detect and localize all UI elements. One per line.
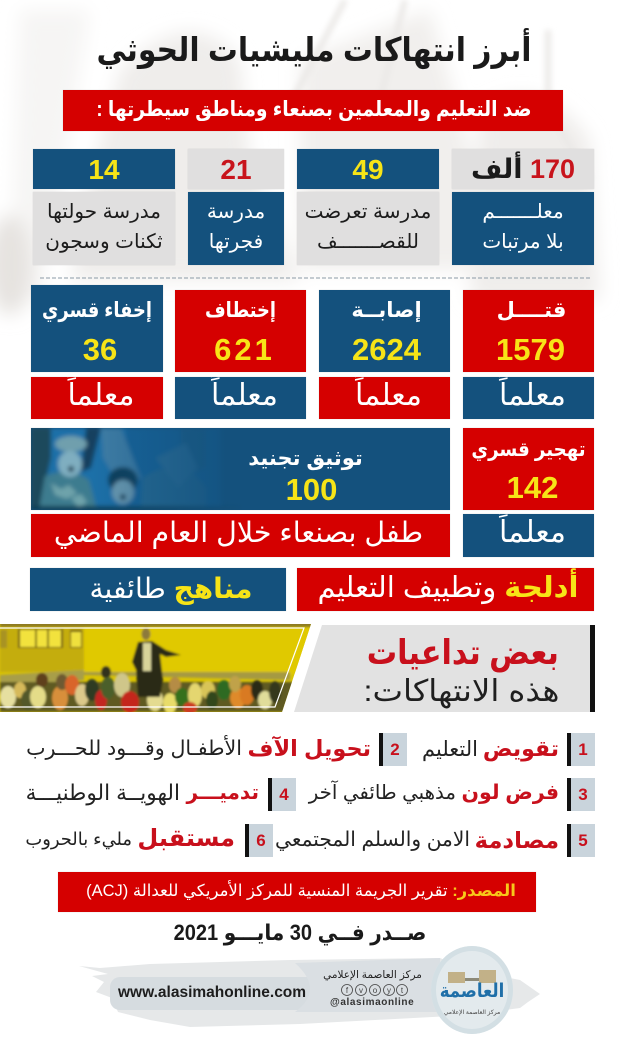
list row 2: تدميـــر <box>186 782 259 804</box>
badge 5: 5 <box>578 831 588 850</box>
social icons: o <box>373 986 378 995</box>
stat: 21 schools blown up: فجرتها <box>209 231 263 253</box>
logo emblem <box>448 970 496 983</box>
subtitle banner <box>63 90 563 131</box>
stat: 21 schools blown up <box>188 148 284 266</box>
banner: ideologising education <box>297 568 594 611</box>
list row 2 <box>26 778 595 811</box>
list row 1: التعليم <box>422 738 478 761</box>
caption: children in Sanaa last year <box>31 514 450 557</box>
badge 2 <box>379 733 407 766</box>
publication date: صــدر فــي 30 مايـــو 2021 <box>174 920 426 945</box>
social icons: t <box>401 986 404 995</box>
stat: injured 2624: إصابــة <box>351 299 422 322</box>
badge 4: 4 <box>279 785 289 804</box>
stat: kidnapped 621 <box>174 290 306 420</box>
badge 3: 3 <box>578 785 588 804</box>
stat: 170 thousand teachers: 170 ألف <box>471 154 575 184</box>
stat: forced disappearance 36: معلماً <box>68 379 134 412</box>
badge 6 <box>245 824 273 857</box>
stat: killed 1579: 1579 <box>496 332 565 367</box>
social icons <box>341 984 408 996</box>
stat: forced disappearance 36: إخفاء قسري <box>42 299 152 322</box>
list row 2: الهويــة الوطنيـــة <box>26 780 180 805</box>
social icons: y <box>387 986 391 995</box>
stat: injured 2624 <box>318 290 450 420</box>
stat: 14 schools turned into barracks: 14 <box>88 154 120 185</box>
source banner: المصدر: تقرير الجريمة المنسية للمركز الأمريكي للعدالة (ACJ) <box>86 882 516 900</box>
list row 3 <box>25 824 595 857</box>
stat: killed 1579: قتــــل <box>497 299 566 322</box>
logo badge <box>431 946 513 1034</box>
list row 1: تقويض <box>483 736 559 761</box>
stat: 14 schools turned into barracks: مدرسة حولتها <box>47 201 161 223</box>
list row 1 <box>26 733 595 766</box>
social icons: f <box>346 986 349 995</box>
badge 2: 2 <box>390 740 400 759</box>
website url: www.alasimahonline.com <box>118 984 306 1001</box>
list row 2: فرض لون <box>462 781 559 804</box>
photo panel: child soldiers <box>31 428 450 510</box>
stat: forced displacement 142: 142 <box>507 470 558 505</box>
source banner <box>58 872 536 912</box>
badge 3 <box>567 778 595 811</box>
list row 1: تحويل الآف <box>247 736 371 761</box>
logo badge: العاصمة <box>440 981 504 1002</box>
stat: 14 schools turned into barracks <box>32 148 176 266</box>
center name and social handles: @alasimaonline <box>330 997 414 1008</box>
list row 3: مليء بالحروب <box>25 829 132 849</box>
list row 3: مستقبل <box>137 825 235 852</box>
badge 6: 6 <box>256 831 266 850</box>
panel: repercussions heading: بعض تداعيات <box>367 634 559 672</box>
title: أبرز انتهاكات مليشيات الحوثي <box>96 31 532 68</box>
stat: forced disappearance 36: 36 <box>83 332 117 367</box>
list row 3: مصادمة <box>475 827 559 853</box>
stat: kidnapped 621: 621 <box>214 332 275 367</box>
stat: 21 schools blown up: 21 <box>220 154 252 185</box>
stat: 170 thousand teachers <box>452 148 594 266</box>
stat: forced displacement 142 <box>462 428 594 558</box>
stat: 49 schools shelled: مدرسة تعرضت <box>305 201 431 223</box>
panel: repercussions heading: هذه الانتهاكات: <box>363 675 559 708</box>
badge 5 <box>567 824 595 857</box>
background: faded soldiers photo <box>0 0 600 318</box>
badge 4 <box>268 778 296 811</box>
center name and social handles: مركز العاصمة الإعلامي <box>323 969 422 981</box>
panel: repercussions heading <box>294 625 595 712</box>
stat: 49 schools shelled <box>296 148 440 266</box>
banner: ideologising education: أدلجة وتطييف التعليم <box>318 572 578 604</box>
social icons: v <box>359 986 363 995</box>
footer brush band <box>80 958 540 1027</box>
stat: injured 2624: معلماً <box>355 379 422 412</box>
badge 1 <box>567 733 595 766</box>
caption: children in Sanaa last year: طفل بصنعاء خلال العام الماضي <box>54 517 423 549</box>
stat: kidnapped 621: معلماً <box>211 379 278 412</box>
stat: killed 1579: معلماً <box>499 379 566 412</box>
stat: injured 2624: 2624 <box>352 332 421 367</box>
subtitle banner: ضد التعليم والمعلمين بصنعاء ومناطق سيطرتها : <box>96 98 532 121</box>
photo panel: child soldiers: توثيق تجنيد <box>248 447 363 470</box>
stat: 170 thousand teachers: بلا مرتبات <box>482 231 564 253</box>
list row 3: الامن والسلم المجتمعي <box>275 829 470 851</box>
stat: forced displacement 142: معلماً <box>499 516 566 549</box>
stat: kidnapped 621: إختطاف <box>205 299 276 322</box>
logo badge: مركز العاصمة الإعلامي <box>444 1010 500 1016</box>
photo: teacher with classroom <box>0 624 311 712</box>
stat: forced displacement 142: تهجير قسري <box>471 439 586 461</box>
stat: forced disappearance 36 <box>30 284 164 420</box>
stat: 14 schools turned into barracks: ثكنات وسجون <box>45 231 163 253</box>
badge 1: 1 <box>578 740 588 759</box>
banner: sectarian curricula: مناهج طائفية <box>90 573 252 604</box>
stat: 49 schools shelled: للقصـــــــف <box>317 231 419 253</box>
stat: killed 1579 <box>462 290 594 420</box>
stat: 49 schools shelled: 49 <box>352 154 384 185</box>
banner: sectarian curricula <box>30 568 286 611</box>
list row 2: مذهبي طائفي آخر <box>309 782 456 804</box>
stat: 21 schools blown up: مدرسة <box>207 201 265 223</box>
photo panel: child soldiers: 100 <box>286 472 337 507</box>
center name and social handles <box>323 969 422 1008</box>
stat: child recruitment 100 <box>30 428 450 558</box>
stat: 170 thousand teachers: معلـــــــم <box>482 201 564 223</box>
list row 1: الأطفـال وقـــود للحـــرب <box>26 737 242 760</box>
